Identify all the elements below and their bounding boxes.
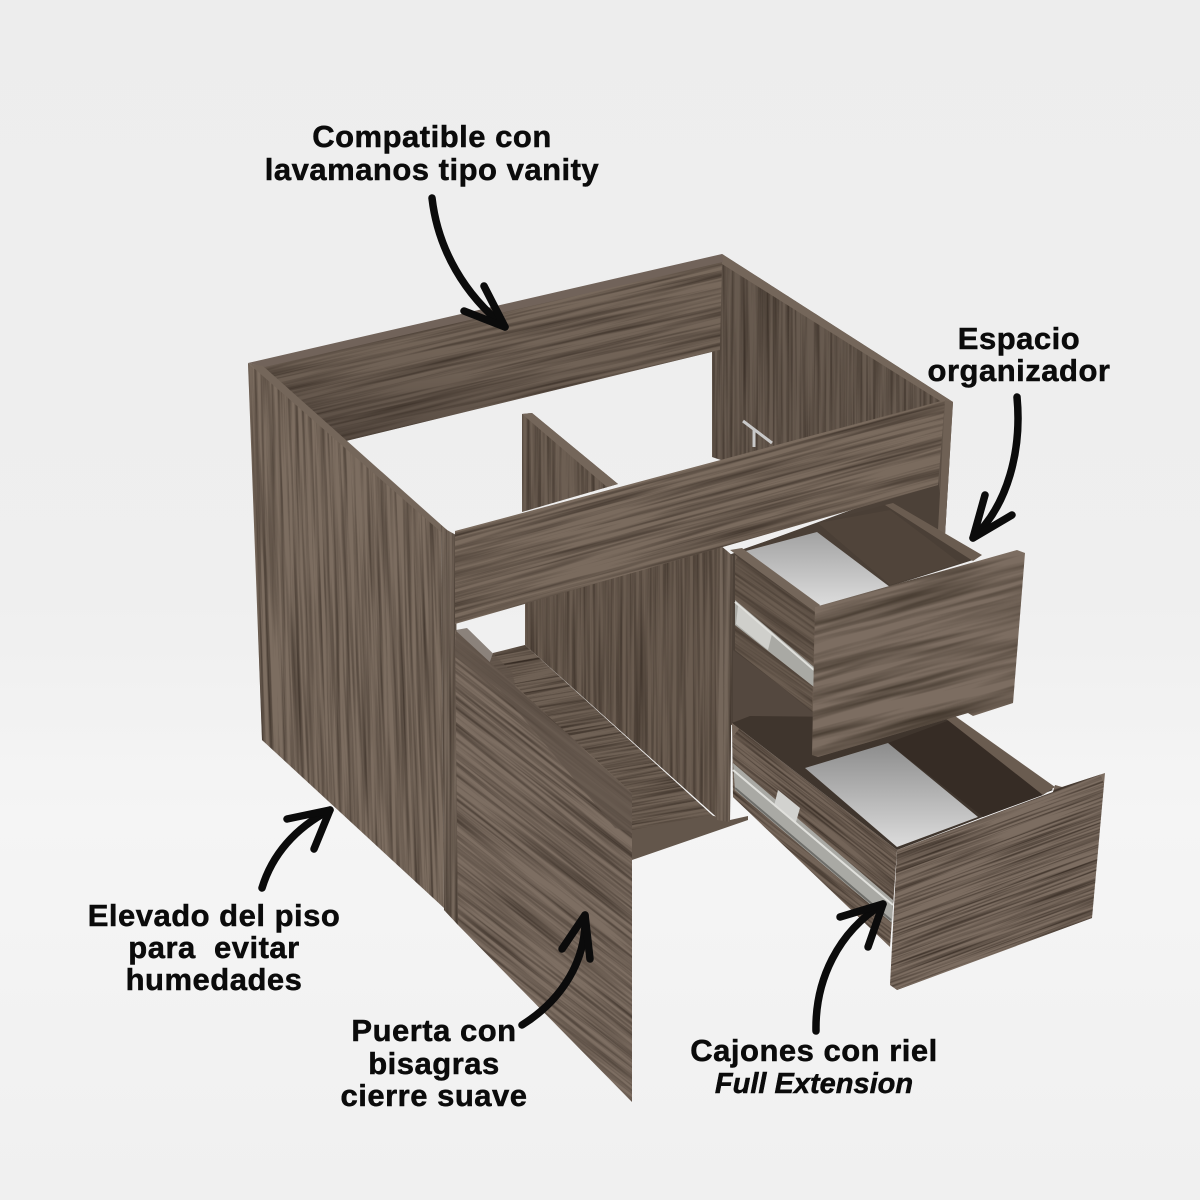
label: drawers: Cajones con riel	[690, 1033, 938, 1068]
dark backing behind drawers	[726, 478, 945, 757]
label: vanity: Compatible con	[312, 119, 552, 154]
label: raised from floor: humedades	[126, 962, 302, 997]
door top edge	[455, 628, 632, 832]
full extension rail	[733, 763, 893, 923]
metal bracket	[743, 421, 772, 447]
drawer side	[735, 555, 815, 712]
upper centre divider	[522, 413, 618, 512]
label: door: bisagras	[368, 1046, 500, 1081]
drawer front	[812, 550, 1025, 757]
right inner wall	[712, 254, 953, 534]
drawer interior	[735, 505, 973, 610]
top drawer	[730, 503, 1025, 757]
drawer interior	[732, 716, 1053, 850]
wood behind drawers	[733, 650, 815, 757]
left side panel	[248, 363, 458, 925]
central divider edge	[717, 547, 733, 822]
back rail	[248, 254, 722, 441]
label: drawers: Full Extension	[715, 1068, 913, 1100]
label: raised from floor: Elevado del piso	[88, 898, 340, 933]
bottom drawer	[732, 716, 1105, 990]
arrow: drawers	[816, 904, 883, 1031]
arrow: raised from floor	[262, 810, 330, 888]
front top rail	[455, 401, 953, 624]
label: organizer: organizador	[928, 353, 1110, 388]
label: door: Puerta con	[351, 1013, 517, 1048]
drawer side	[732, 723, 897, 947]
compartment floor	[490, 645, 748, 860]
label: vanity: lavamanos tipo vanity	[265, 152, 599, 187]
drawer rail	[735, 600, 814, 687]
arrow: vanity	[432, 198, 505, 327]
label: raised from floor: para evitar	[128, 930, 300, 965]
lower back panel	[525, 548, 720, 817]
drawer bottom metal	[805, 743, 978, 847]
label: door: cierre suave	[341, 1078, 527, 1113]
arrow: organizer	[973, 397, 1018, 538]
arrow: door	[522, 915, 590, 1025]
door	[455, 628, 632, 1102]
cabinet	[248, 199, 1105, 1102]
label: organizer: Espacio	[958, 321, 1080, 356]
drawer bottom metal	[742, 532, 890, 608]
drawer front	[890, 773, 1105, 990]
